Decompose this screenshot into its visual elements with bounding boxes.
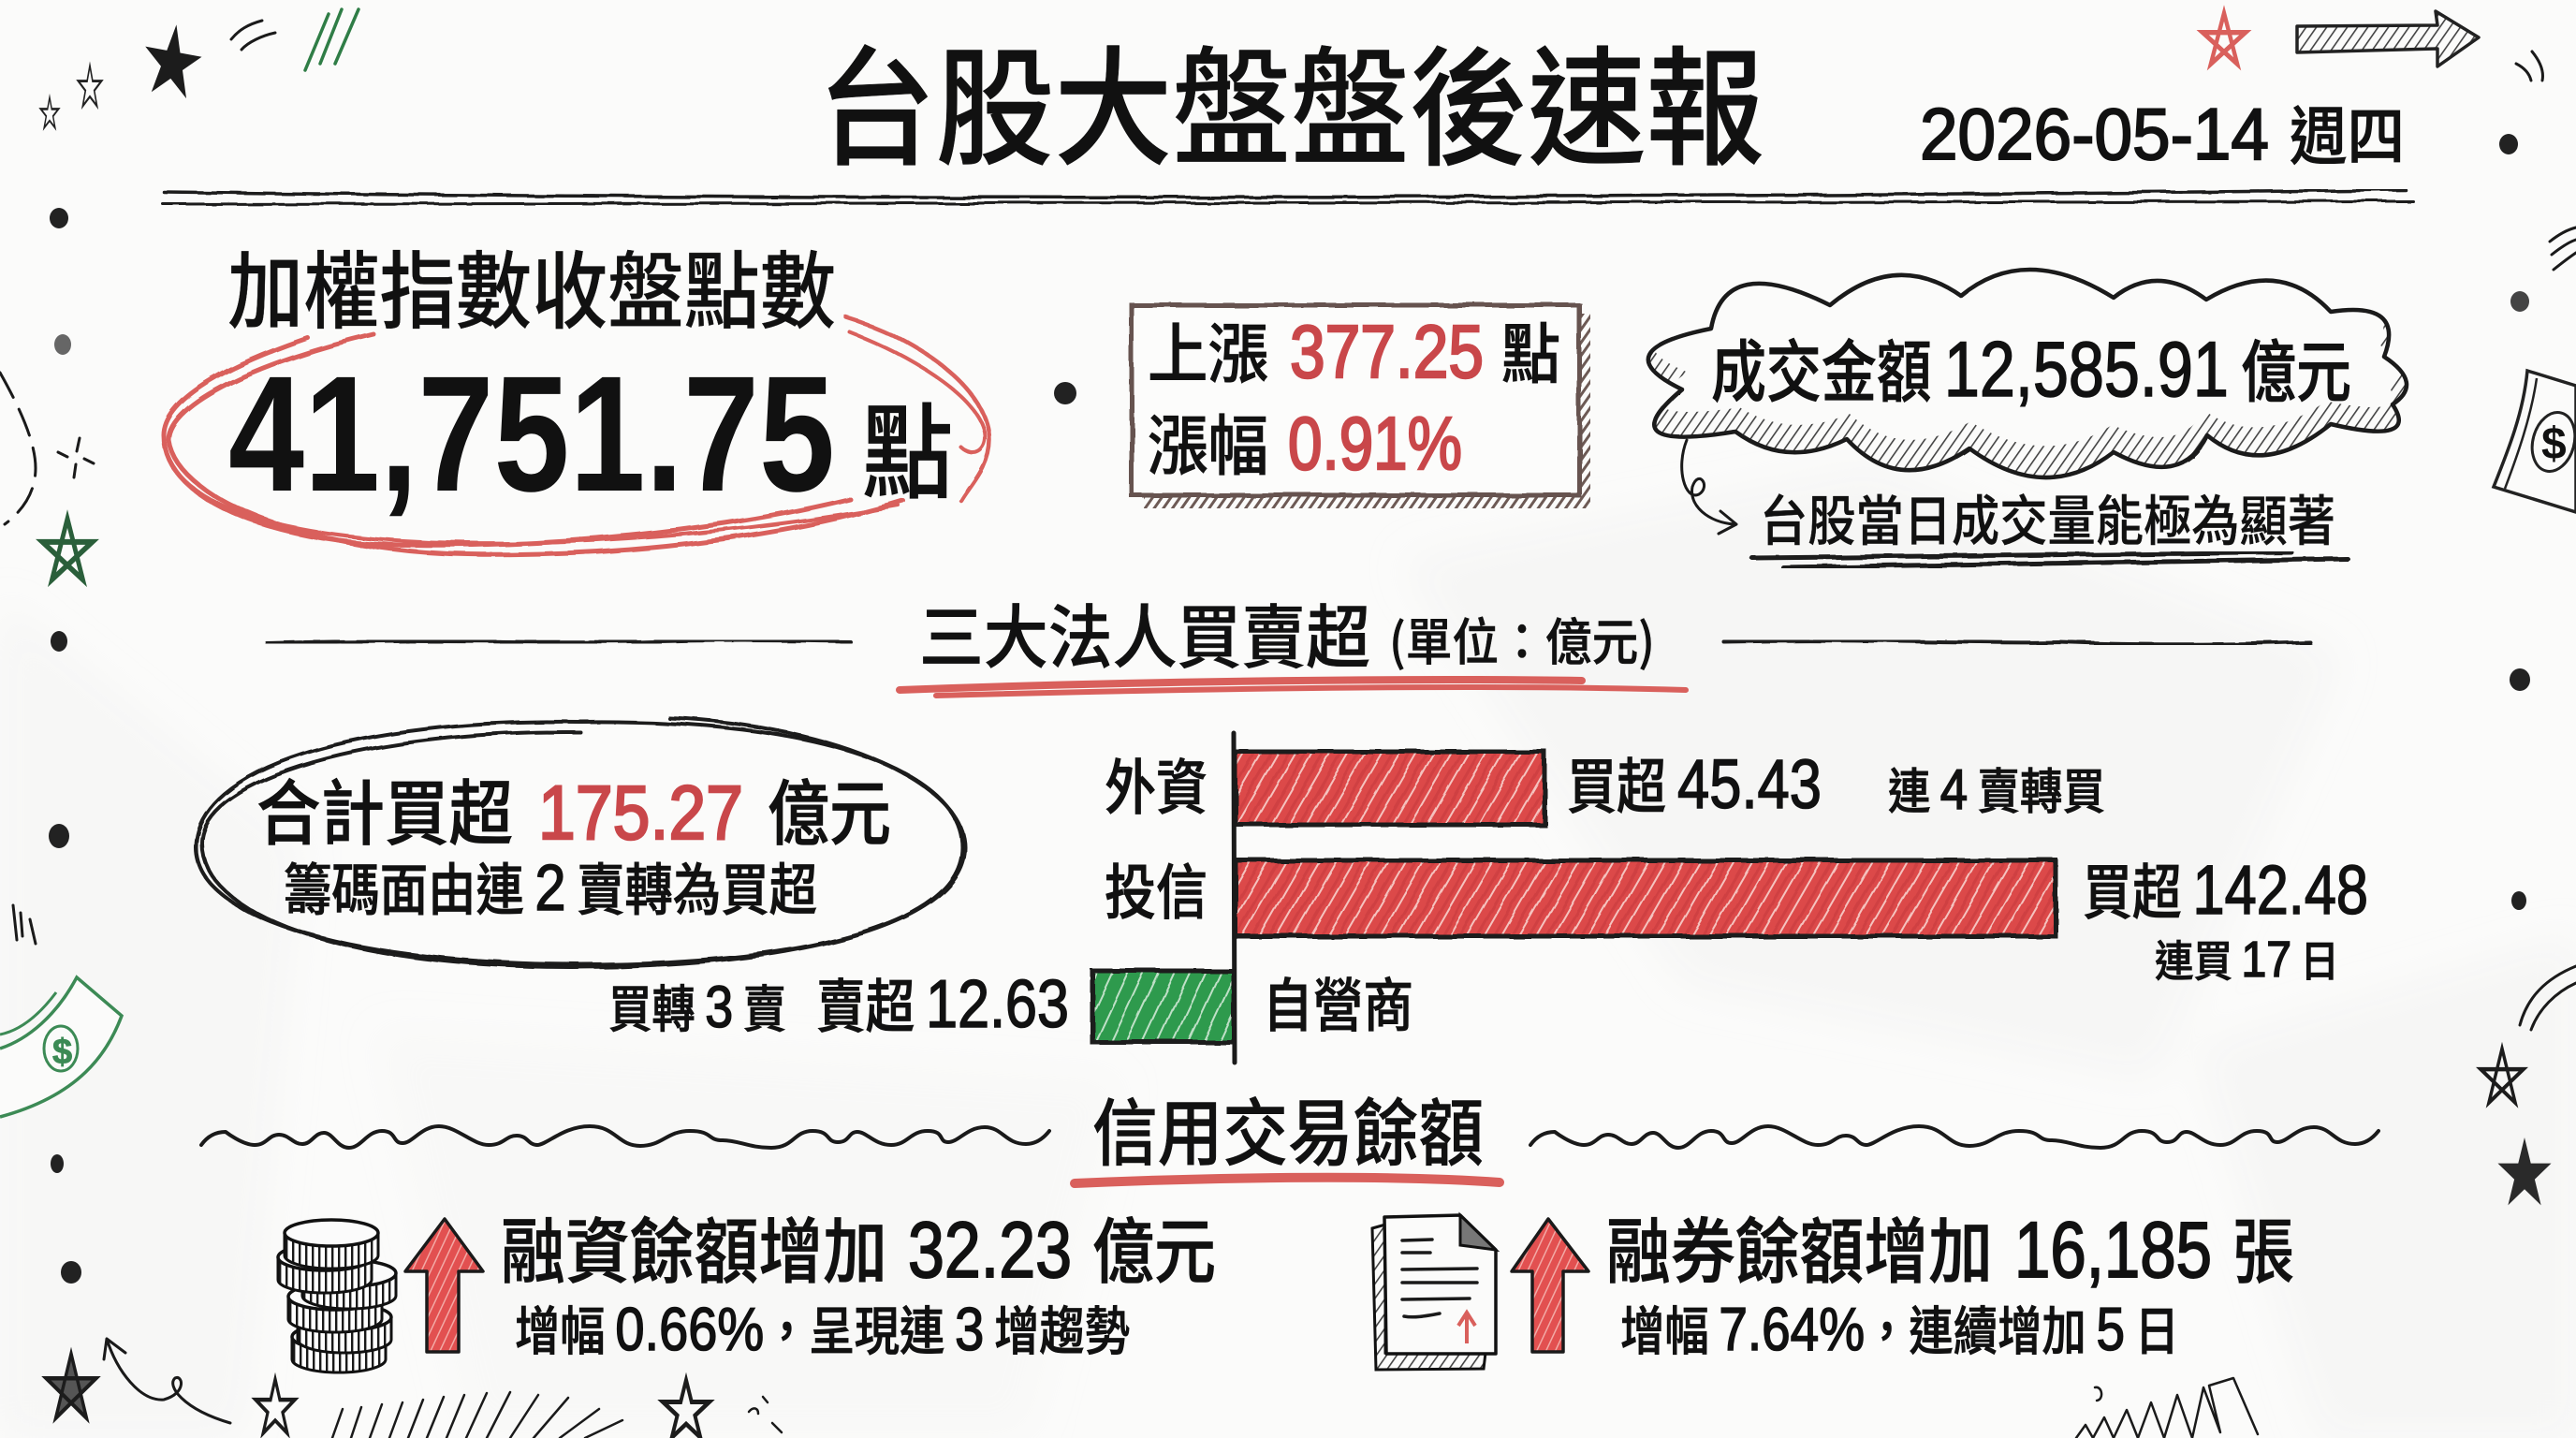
financing amount: 億元 (1092, 1195, 1216, 1298)
box outline (1132, 305, 1579, 495)
section heading: margin balance: 信用交易餘額 (1092, 1076, 1484, 1181)
bar: investment trust: 買超 142.48 (2083, 845, 2368, 932)
bar: foreign investors (1105, 740, 2105, 827)
change points: 點 (1501, 302, 1560, 397)
section heading: margin balance (201, 1076, 2378, 1183)
financing amount: 32.23 (908, 1206, 1072, 1294)
panel: turnover cloud (1648, 270, 2407, 567)
icon: document (1372, 1215, 1496, 1370)
turnover text: 成交金額 12,585.91 億元 (1711, 317, 2351, 416)
chart axis (1234, 733, 1235, 1063)
change percent: 漲幅 (1148, 394, 1268, 489)
title: 台股大盤盤後速報 (817, 5, 1764, 192)
index heading: 加權指數收盤點數 (227, 224, 836, 345)
short selling amount: 張 (2232, 1195, 2294, 1298)
cloud shape (1648, 270, 2407, 477)
panel: index close (164, 224, 989, 554)
index unit: 點 (862, 370, 953, 520)
change points: 上漲 (1148, 302, 1268, 397)
icon: right stars (2481, 1049, 2552, 1205)
financing note: 增幅 0.66%，呈現連 3 增趨勢 (515, 1290, 1130, 1366)
change percent: 0.91% (1288, 402, 1462, 485)
bar: dealers (608, 959, 1413, 1044)
bar: investment trust (1105, 845, 2368, 990)
total text: 合計買超 (256, 756, 513, 859)
total note: 籌碼面由連 2 賣轉為買超 (284, 845, 817, 927)
icon: top-right hatched arrow (2297, 11, 2479, 66)
panel: short selling (1372, 1195, 2294, 1370)
turnover note: 台股當日成交量能極為顯著 (1760, 477, 2335, 556)
bar: foreign investors: 外資 (1105, 741, 1208, 827)
header divider lines (163, 190, 2413, 206)
bar: dealers: 買轉 3 賣 (608, 968, 786, 1042)
black hand-drawn circle (196, 718, 965, 967)
index value: 41,751.75 (228, 343, 835, 526)
icon: green star (42, 519, 93, 580)
total text (256, 756, 891, 859)
section heading: institutional: 三大法人買賣超 (919, 582, 1370, 682)
bar: dealers: 自營商 (1263, 959, 1413, 1043)
total text: 億元 (768, 756, 891, 859)
short selling note: 增幅 7.64%，連續增加 5 日 (1620, 1290, 2179, 1366)
decorative dots (49, 134, 2530, 1284)
icon: right strokes (2516, 51, 2576, 1030)
bar: foreign investors: 買超 45.43 (1567, 740, 1822, 826)
change points: 377.25 (1290, 310, 1484, 393)
icon: top-right red star (2203, 13, 2246, 64)
icon: green money: $ (52, 1033, 72, 1072)
note underline (1752, 552, 2348, 567)
bar chart: institutional net buy/sell (608, 733, 2368, 1063)
bar: foreign investors: 連 4 賣轉買 (1888, 753, 2105, 823)
panel: change box (1132, 302, 1590, 508)
bar: dealers: 賣超 12.63 (816, 960, 1069, 1044)
change percent (1148, 394, 1462, 489)
icon: green money (0, 977, 122, 1117)
icon: bottom-right scribble (2076, 1378, 2258, 1438)
panel: margin financing (278, 1195, 1216, 1372)
icon: top-left stars and strokes (40, 9, 359, 128)
bar: investment trust: 投信 (1105, 845, 1208, 932)
short selling amount: 16,185 (2014, 1206, 2212, 1294)
curly arrow (1682, 440, 1736, 534)
callout: total net buy (196, 718, 965, 967)
date: 週四 (2290, 85, 2405, 178)
icon: red up arrow (1512, 1219, 1588, 1352)
financing amount: 融資餘額增加 (501, 1195, 887, 1298)
icon: left strokes (13, 905, 36, 944)
section heading: institutional (267, 582, 2310, 696)
box hatch shadow (1144, 314, 1590, 508)
icon: coin stack (278, 1220, 396, 1372)
financing amount (501, 1195, 1216, 1298)
total text: 175.27 (538, 770, 743, 856)
icon: red up arrow (405, 1219, 483, 1352)
icon: money note right: $ (2541, 419, 2567, 469)
icon: left dashed arc and sparkle (0, 373, 94, 524)
bar: investment trust: 連買 17 日 (2155, 928, 2339, 990)
short selling amount (1606, 1195, 2294, 1298)
date: 2026-05-14 (1920, 93, 2269, 175)
icon: bottom hatching (332, 1392, 782, 1438)
icon: bottom-left star and curly arrow (46, 1339, 710, 1438)
red hand-drawn circle (164, 317, 989, 554)
section heading: institutional: (單位：億元) (1389, 601, 1655, 675)
date (1920, 85, 2405, 178)
change points (1148, 302, 1560, 397)
short selling amount: 融券餘額增加 (1606, 1195, 1993, 1298)
icon: money note right (2494, 371, 2576, 512)
